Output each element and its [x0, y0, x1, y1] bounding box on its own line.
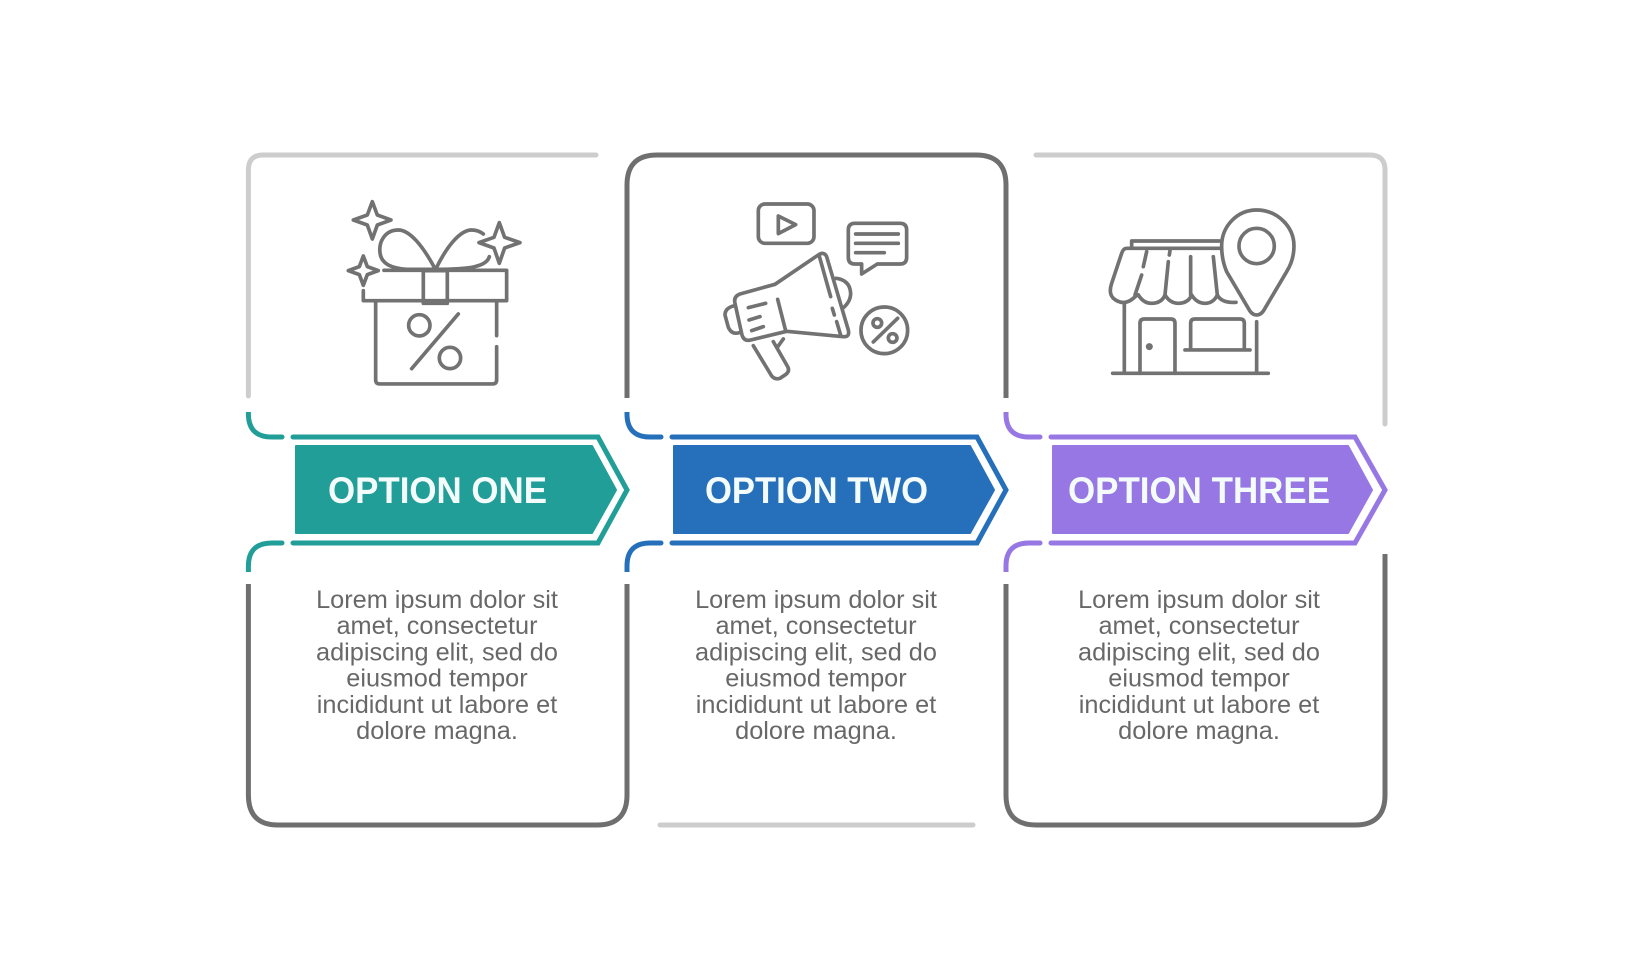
panel: option one	[248, 155, 627, 825]
panel: option three	[1006, 155, 1385, 825]
body text one: incididunt ut labore et	[317, 691, 557, 719]
heading: option three: OPTION THREE	[1068, 470, 1330, 511]
body text three: amet, consectetur	[1098, 612, 1300, 640]
bracket top two	[627, 412, 664, 440]
body text three	[1078, 586, 1320, 745]
upper frame three	[1036, 155, 1385, 424]
bracket bottom one	[248, 540, 284, 572]
body text two: incididunt ut labore et	[696, 691, 936, 719]
upper frame two	[627, 155, 1006, 398]
heading: option two: OPTION TWO	[705, 470, 928, 511]
body text three: Lorem ipsum dolor sit	[1078, 586, 1320, 614]
arrow outline two	[672, 437, 1006, 543]
body text one: eiusmod tempor	[346, 665, 528, 693]
body text one: amet, consectetur	[336, 612, 538, 640]
body text two	[695, 586, 937, 745]
body text one: dolore magna.	[356, 717, 518, 745]
body text three: incididunt ut labore et	[1079, 691, 1319, 719]
icon: gift with percent	[348, 202, 520, 384]
body text two: amet, consectetur	[715, 612, 917, 640]
body text three: adipiscing elit, sed do	[1078, 638, 1320, 666]
lower rule two	[660, 822, 973, 828]
lower frame one	[248, 584, 627, 825]
arrow banner one	[296, 446, 616, 533]
body text one: adipiscing elit, sed do	[316, 638, 558, 666]
body text two: adipiscing elit, sed do	[695, 638, 937, 666]
icon: store with location pin	[1110, 210, 1294, 373]
body text two: dolore magna.	[735, 717, 897, 745]
arrow banner three	[1053, 446, 1372, 533]
bracket bottom two	[627, 540, 664, 572]
icon: megaphone with media	[725, 204, 908, 379]
panel: option two	[627, 155, 1006, 825]
lower frame three	[1006, 554, 1385, 825]
heading: option one: OPTION ONE	[328, 470, 547, 511]
bracket bottom three	[1006, 540, 1042, 572]
arrow outline one	[293, 437, 627, 543]
bracket top three	[1006, 412, 1042, 440]
arrow outline three	[1051, 437, 1385, 543]
upper frame one	[248, 155, 596, 396]
body text three: eiusmod tempor	[1108, 665, 1290, 693]
body text two: eiusmod tempor	[725, 665, 907, 693]
body text three: dolore magna.	[1118, 717, 1280, 745]
arrow banner two	[674, 446, 994, 533]
body text one	[316, 586, 558, 745]
bracket top one	[248, 412, 284, 440]
body text two: Lorem ipsum dolor sit	[695, 586, 937, 614]
body text one: Lorem ipsum dolor sit	[316, 586, 558, 614]
